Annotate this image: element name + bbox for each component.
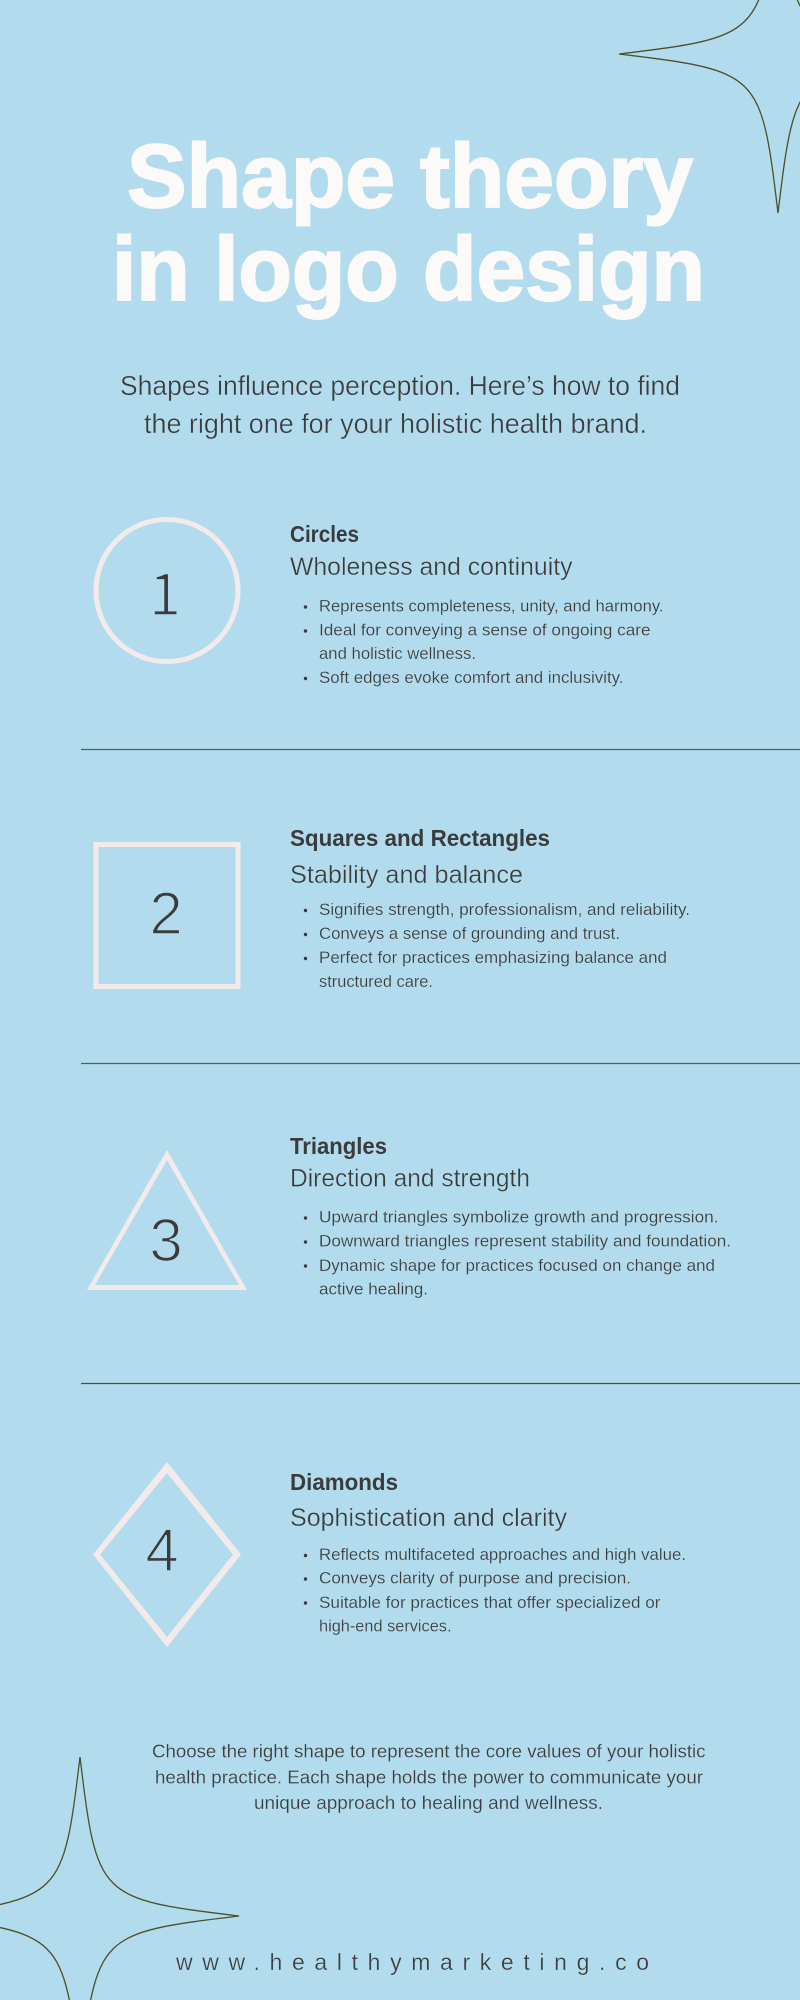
icon: diamond with number 4: 4 — [145, 1517, 179, 1584]
bullet list: squares and rectangles — [304, 900, 690, 991]
bullet list: circles: Ideal for conveying a sense of ongoing care — [319, 620, 650, 640]
subheading: triangles: Direction and strength — [290, 1164, 530, 1192]
intro text: the right one for your holistic health brand. — [144, 408, 647, 439]
subheading: squares and rectangles: Stability and balance — [290, 861, 523, 889]
subheading: diamonds: Sophistication and clarity — [290, 1504, 567, 1532]
icon: square with number 2 — [96, 844, 238, 986]
bullet list: squares and rectangles: Perfect for practices emphasizing balance and — [319, 948, 667, 967]
bullet list: diamonds: Conveys clarity of purpose and precision. — [319, 1568, 631, 1588]
bullet list: circles — [304, 596, 664, 687]
bullet list: squares and rectangles: Conveys a sense of grounding and trust. — [319, 924, 620, 943]
subheading: circles: Wholeness and continuity — [290, 553, 573, 581]
panel: circles — [96, 520, 664, 687]
bullet list: diamonds — [304, 1545, 686, 1636]
bullet list: triangles: Upward triangles symbolize growth and progression. — [319, 1208, 718, 1226]
icon: triangle with number 3 — [87, 1150, 247, 1290]
icon: circle with number 1 — [96, 520, 238, 662]
website url: www.healthymarketing.co — [175, 1949, 649, 1975]
closing paragraph: health practice. Each shape holds the power to communicate your — [155, 1768, 703, 1788]
heading: diamonds: Diamonds — [290, 1469, 398, 1495]
closing paragraph — [152, 1742, 706, 1813]
icon: diamond with number 4 — [93, 1462, 241, 1647]
bullet list: diamonds: Suitable for practices that offer specialized or — [319, 1593, 661, 1612]
bullet list: squares and rectangles: Signifies strength, professionalism, and reliability. — [319, 900, 690, 919]
title: in logo design — [112, 220, 705, 320]
bullet list: triangles: Dynamic shape for practices focused on change and — [319, 1256, 715, 1275]
decorative star: top right — [619, 0, 800, 213]
bullet list: triangles: active healing. — [319, 1280, 428, 1298]
bullet list: diamonds: Reflects multifaceted approaches and high value. — [319, 1545, 686, 1564]
bullet list: squares and rectangles: structured care. — [319, 972, 433, 991]
bullet list: diamonds: high-end services. — [319, 1616, 452, 1636]
bullet list: triangles — [304, 1208, 731, 1298]
closing paragraph: unique approach to healing and wellness. — [254, 1793, 603, 1813]
title — [112, 127, 705, 320]
panel: diamonds — [93, 1462, 686, 1647]
closing paragraph: Choose the right shape to represent the core values of your holistic — [152, 1742, 706, 1762]
decorative star: bottom left — [0, 1757, 239, 2000]
bullet list: triangles: Downward triangles represent stability and foundation. — [319, 1232, 731, 1250]
heading: triangles: Triangles — [290, 1133, 387, 1159]
bullet list: circles: Soft edges evoke comfort and inclusivity. — [319, 668, 624, 687]
icon: triangle with number 3: 3 — [149, 1207, 183, 1274]
panel: squares and rectangles — [96, 825, 690, 991]
intro text — [120, 370, 680, 439]
icon: circle with number 1: 1 — [149, 548, 181, 632]
heading: squares and rectangles: Squares and Rectangles — [290, 825, 550, 851]
title: Shape theory — [127, 127, 693, 227]
panel: triangles — [87, 1133, 731, 1298]
intro text: Shapes influence perception. Here’s how to find — [120, 370, 680, 401]
heading: circles: Circles — [290, 521, 359, 547]
bullet list: circles: Represents completeness, unity, and harmony. — [319, 596, 664, 616]
icon: square with number 2: 2 — [149, 880, 183, 947]
bullet list: circles: and holistic wellness. — [319, 644, 476, 663]
